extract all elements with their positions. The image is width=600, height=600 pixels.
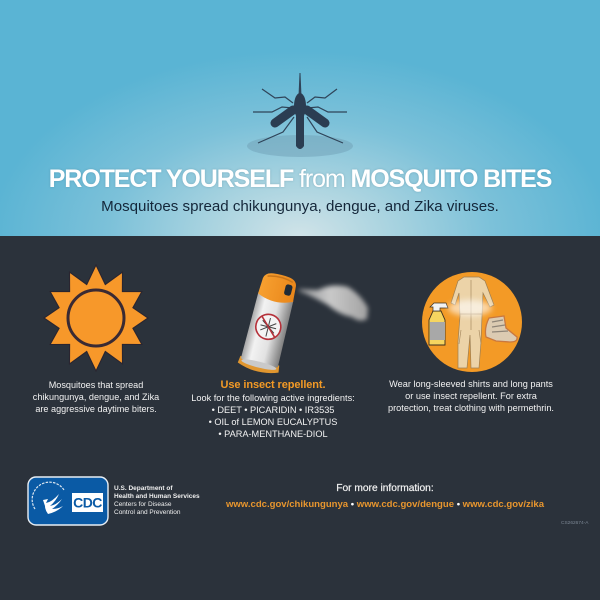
icon: protective clothing circle: [422, 272, 522, 372]
icon: no mosquito sign: [253, 312, 283, 342]
text block: daytime biters: [33, 380, 160, 414]
subtitle: Mosquitoes spread chikungunya, dengue, and Zika viruses.: [101, 198, 499, 215]
text block: use insect repellent: • OIL of LEMON EUCALYPTUS: [209, 417, 337, 427]
text block: use insect repellent: • PARA-MENTHANE-DIOL: [218, 429, 328, 439]
more information: For more information:: [336, 483, 434, 494]
title: PROTECT YOURSELF from MOSQUITO BITES: [49, 165, 551, 193]
text block: use insect repellent: Look for the following active ingredients:: [191, 393, 355, 403]
agency text: Health and Human Services: [114, 493, 200, 500]
text block: daytime biters: chikungunya, dengue, and Zika: [33, 392, 159, 402]
agency text: Control and Prevention: [114, 509, 180, 516]
icon: spray cloud: [299, 286, 368, 321]
more information: [226, 483, 544, 510]
text block: use insect repellent: Use insect repellent.: [221, 379, 325, 391]
text block: daytime biters: Mosquitoes that spread: [49, 380, 143, 390]
text block: use insect repellent: • DEET • PICARIDIN • IR3535: [212, 405, 334, 415]
CDC logo: [27, 476, 109, 526]
text block: use insect repellent: [191, 379, 355, 439]
more information: www.cdc.gov/chikungunya • www.cdc.gov/dengue • www.cdc.gov/zika: [226, 499, 544, 510]
agency text: [114, 485, 200, 516]
icon: spray bottle: [429, 303, 448, 345]
text block: clothing: or use insect repellent. For extra: [405, 391, 537, 401]
agency text: Centers for Disease: [114, 501, 171, 508]
text block: clothing: Wear long-sleeved shirts and long pants: [389, 379, 553, 389]
icon: boots: [485, 316, 517, 342]
icon: mosquito: [247, 73, 353, 157]
publication code: CS262674-A: [561, 521, 588, 526]
icon: repellent can: [237, 270, 302, 377]
text block: clothing: [388, 379, 554, 413]
text block: daytime biters: are aggressive daytime biters.: [35, 404, 157, 414]
header background panel: [0, 0, 600, 236]
agency text: U.S. Department of: [114, 485, 173, 492]
icon: spray mist: [448, 300, 492, 316]
CDC logo: CDC: [73, 494, 102, 510]
icon: coveralls: [451, 277, 494, 368]
icon: sun: [44, 265, 148, 371]
text block: clothing: protection, treat clothing with permethrin.: [388, 403, 554, 413]
